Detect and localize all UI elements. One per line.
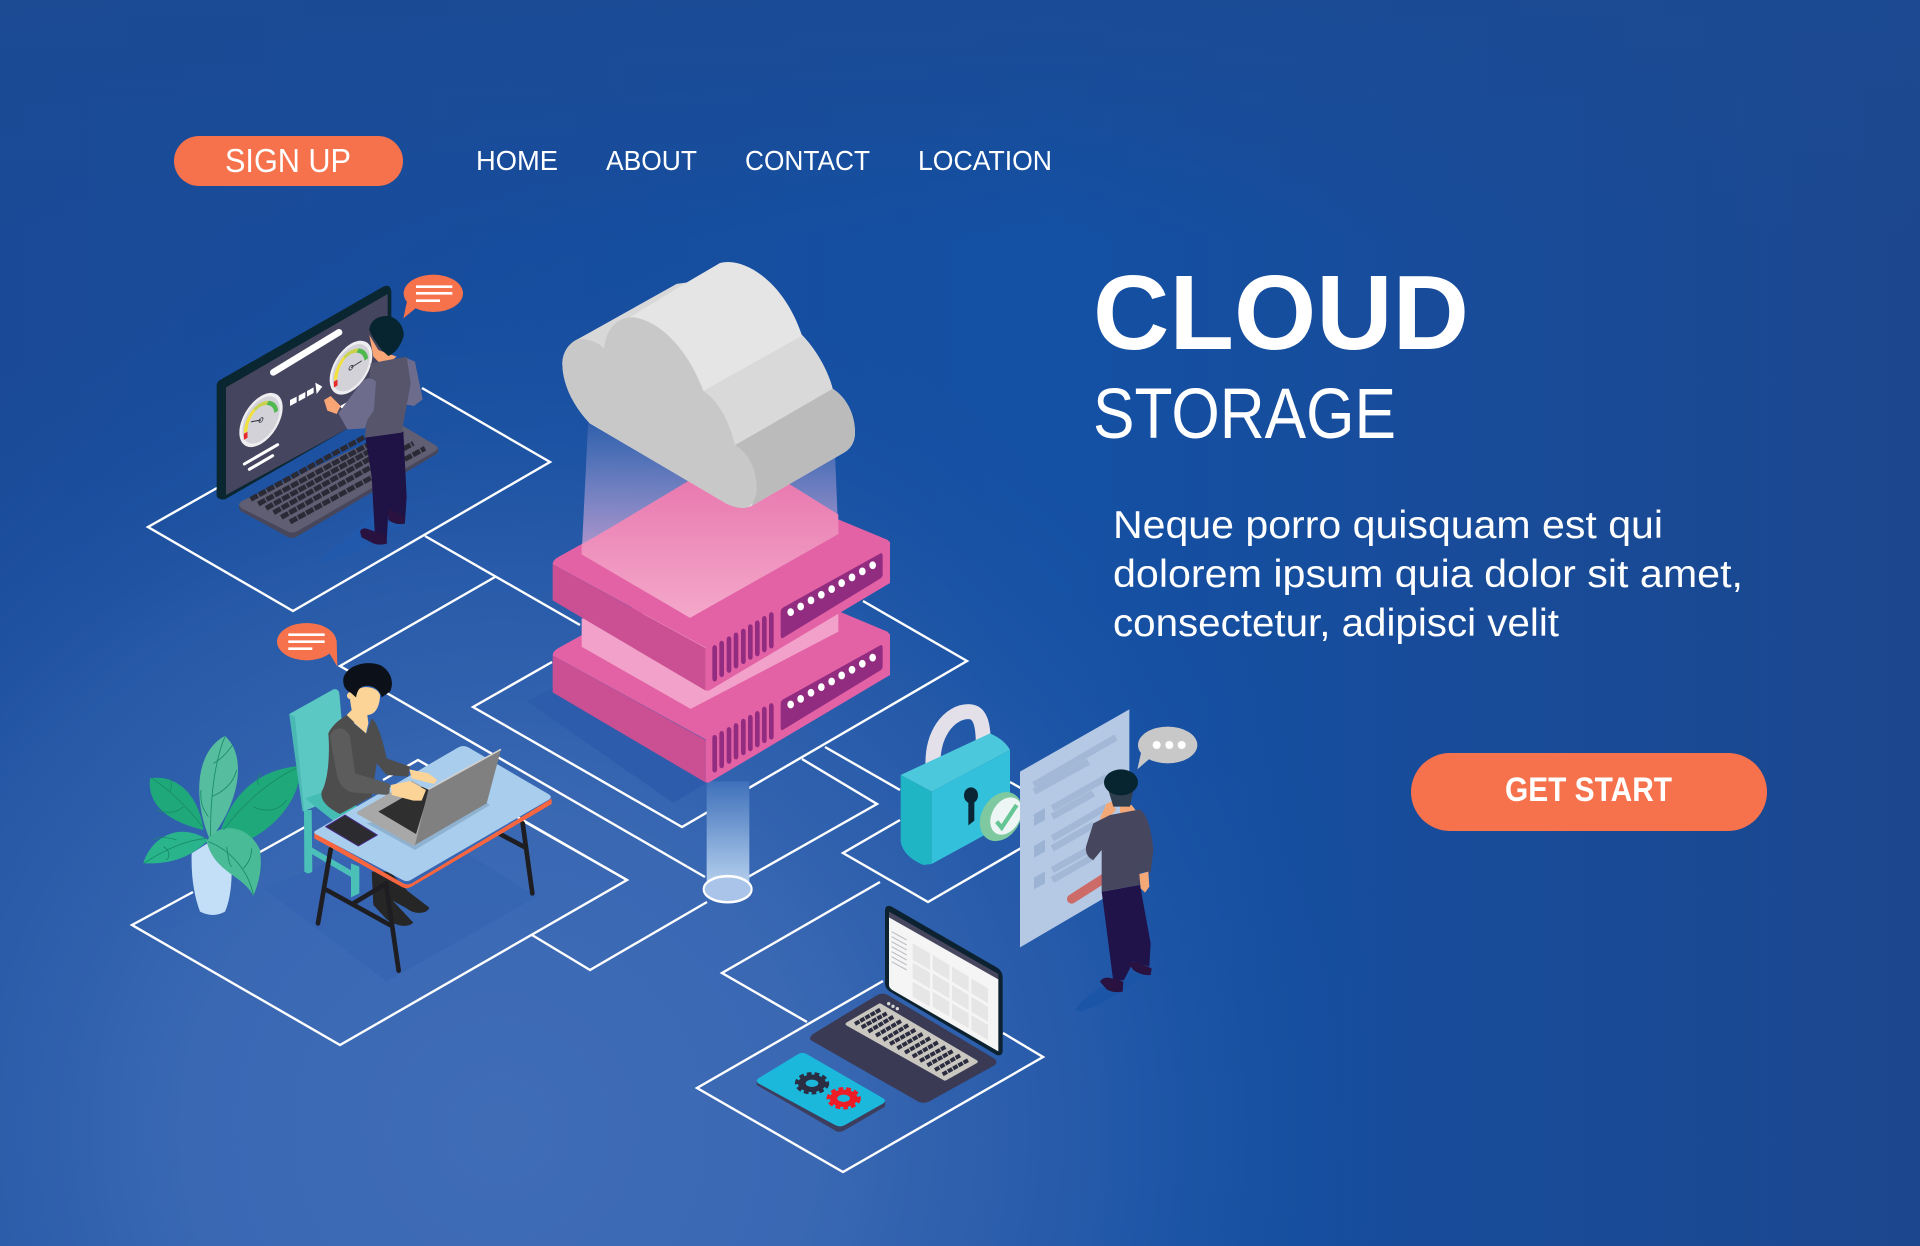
desk scene with plant xyxy=(143,623,552,982)
description text xyxy=(1113,504,1743,645)
description text: Neque porro quisquam est qui xyxy=(1113,504,1663,547)
plant leaves xyxy=(143,736,300,896)
monitor xyxy=(217,286,391,499)
get start button: GET START xyxy=(1505,771,1672,809)
floor shadow xyxy=(527,688,717,803)
floor shadow xyxy=(1076,973,1147,1012)
phone xyxy=(326,815,377,846)
plant pot xyxy=(192,843,232,915)
nav link: contact: CONTACT xyxy=(745,145,870,176)
light between servers xyxy=(582,597,838,709)
cloud xyxy=(562,262,855,508)
lower server xyxy=(553,560,890,783)
keyboard xyxy=(239,426,438,538)
desk xyxy=(314,746,552,971)
title: STORAGE xyxy=(1093,375,1396,454)
form sheet xyxy=(1020,709,1129,947)
title: CLOUD xyxy=(1093,254,1469,372)
nav link: home: HOME xyxy=(476,145,558,176)
arrow on screen xyxy=(290,383,322,406)
window content xyxy=(913,943,988,1040)
speech bubble xyxy=(277,623,337,667)
seated person xyxy=(321,663,410,814)
floor shadows xyxy=(155,853,537,982)
description text: dolorem ipsum quia dolor sit amet, xyxy=(1113,553,1743,596)
settings tablet xyxy=(757,1053,885,1132)
floor shadow xyxy=(318,510,403,562)
laptop on desk xyxy=(357,749,501,850)
hands xyxy=(391,769,437,801)
laptop and settings tablet xyxy=(757,906,1003,1132)
cloud and server stack xyxy=(527,262,890,902)
description text: consectetur, adipisci velit xyxy=(1113,602,1559,645)
padlock xyxy=(901,712,1010,865)
data beam to cloud xyxy=(582,419,838,618)
gear red xyxy=(828,1089,859,1108)
get start button xyxy=(1411,753,1767,831)
gauge left xyxy=(239,383,283,457)
sign up button: SIGN UP xyxy=(225,142,351,179)
technician xyxy=(324,316,423,545)
seated person legs xyxy=(372,872,429,926)
chair xyxy=(289,689,360,897)
isometric connector lines xyxy=(132,388,1073,1172)
speech bubble xyxy=(1137,727,1197,769)
padlock, form and person xyxy=(901,709,1197,1012)
navigation bar xyxy=(174,136,1052,186)
nav link: location: LOCATION xyxy=(918,145,1052,176)
upper server xyxy=(553,469,890,691)
check badge xyxy=(971,784,1031,849)
monitor with technician xyxy=(217,275,463,562)
title xyxy=(1093,254,1469,454)
laptop xyxy=(810,906,1003,1103)
screen text lines xyxy=(244,398,358,469)
gear dark xyxy=(797,1074,827,1093)
nav link: about: ABOUT xyxy=(606,145,697,176)
speech bubble xyxy=(403,275,463,318)
standing person xyxy=(1086,769,1153,992)
gauge right xyxy=(330,331,372,404)
data beam down xyxy=(704,781,752,902)
sign up button xyxy=(174,136,403,186)
